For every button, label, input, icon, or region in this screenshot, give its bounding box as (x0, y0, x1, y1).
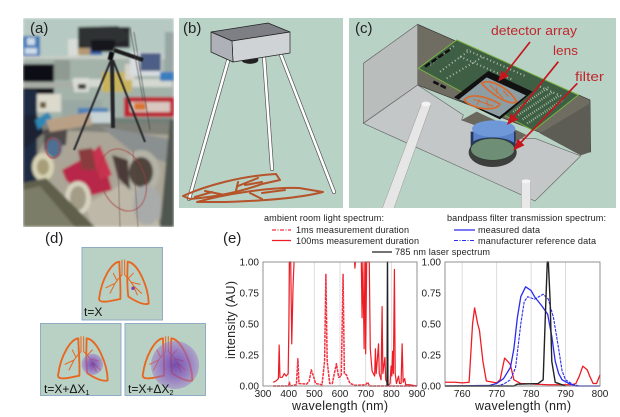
panel (c): camera interior (349, 18, 616, 210)
label (a): (a) (30, 20, 48, 37)
legend: ambient light: ambient room light spectrum: (264, 213, 384, 223)
panel (d): t=X+dX1 (40, 324, 121, 397)
axis title x: wavelength (nm) (474, 399, 571, 413)
legend: laser: 785 nm laser spectrum (395, 247, 490, 257)
y axis labels (422, 258, 441, 392)
lung shadow on the floor (183, 174, 323, 202)
x axis labels: 760 (454, 389, 471, 400)
x axis labels: 800 (592, 389, 609, 400)
panel (b): tripod sketch (179, 18, 343, 208)
circuit board (418, 40, 578, 131)
detector array (454, 71, 533, 119)
red arrows (499, 42, 577, 149)
legend: bandpass filter: manufacturer reference data (478, 236, 597, 246)
y axis labels: 0.25 (240, 350, 259, 362)
panel (d): t=X+dX1: 1 (85, 388, 90, 397)
x axis labels: 300 (255, 389, 272, 400)
panel (d): t=X+dX2: t=X+ΔX (128, 382, 169, 396)
chart: ambient light spectrum (224, 258, 426, 413)
y axis labels: 0.50 (422, 320, 441, 330)
y axis labels: 0.75 (240, 288, 259, 300)
x axis labels: 400 (280, 389, 297, 400)
spectrum lines (445, 262, 600, 386)
y axis labels: 0.25 (422, 350, 441, 362)
mounting poles (382, 102, 531, 210)
callout: lens: lens (553, 43, 579, 58)
axis title y: intensity (AU) (224, 281, 238, 359)
legend: ambient light (264, 213, 419, 246)
legend: bandpass filter: measured data (478, 225, 541, 235)
label (e): (e) (223, 230, 241, 247)
y axis labels: 1.00 (240, 258, 259, 268)
callout: filter: filter (575, 69, 605, 84)
spectrum lines (273, 262, 417, 386)
axis title x: wavelength (nm) (291, 399, 388, 413)
panel (d): t=X+dX1: t=X+ΔX (44, 382, 85, 396)
y axis labels: 1.00 (422, 258, 441, 268)
camera box (211, 23, 290, 64)
x axis labels: 700 (357, 389, 374, 400)
callout: detector array: detector array (491, 23, 578, 38)
x axis labels (454, 389, 609, 400)
x axis labels: 600 (332, 389, 349, 400)
panel (d): t=X+dX2: 2 (169, 388, 174, 397)
chart: bandpass filter detail (422, 258, 609, 413)
label (c): (c) (355, 20, 372, 37)
tripod legs (189, 55, 334, 199)
filter and lens (469, 120, 517, 167)
y axis labels: 0.75 (422, 288, 441, 300)
x axis labels: 800 (383, 389, 400, 400)
y axis labels (240, 258, 259, 392)
x axis labels: 770 (488, 389, 505, 400)
x axis labels: 780 (523, 389, 540, 400)
label (d): (d) (45, 230, 63, 247)
legend: ambient light: 1ms measurement duration (296, 225, 409, 235)
y axis labels: 0.50 (240, 320, 259, 330)
legend: bandpass filter: bandpass filter transmission spectrum: (447, 213, 606, 223)
panel (d): t=X+dX2 (125, 324, 206, 397)
y axis labels: 0.00 (240, 382, 259, 392)
x axis labels (255, 389, 426, 400)
enclosure walls and floor (363, 24, 591, 201)
x axis labels: 500 (306, 389, 323, 400)
label (b): (b) (183, 20, 201, 37)
photo panel (a) (23, 18, 174, 227)
panel (d): t=X (82, 248, 162, 320)
x axis labels: 790 (557, 389, 574, 400)
x axis labels: 900 (409, 389, 426, 400)
legend: ambient light: 100ms measurement duration (296, 236, 419, 246)
legend: bandpass filter (447, 213, 606, 246)
panel (d): t=X: t=X (84, 305, 102, 319)
y axis labels: 0.00 (422, 382, 441, 392)
